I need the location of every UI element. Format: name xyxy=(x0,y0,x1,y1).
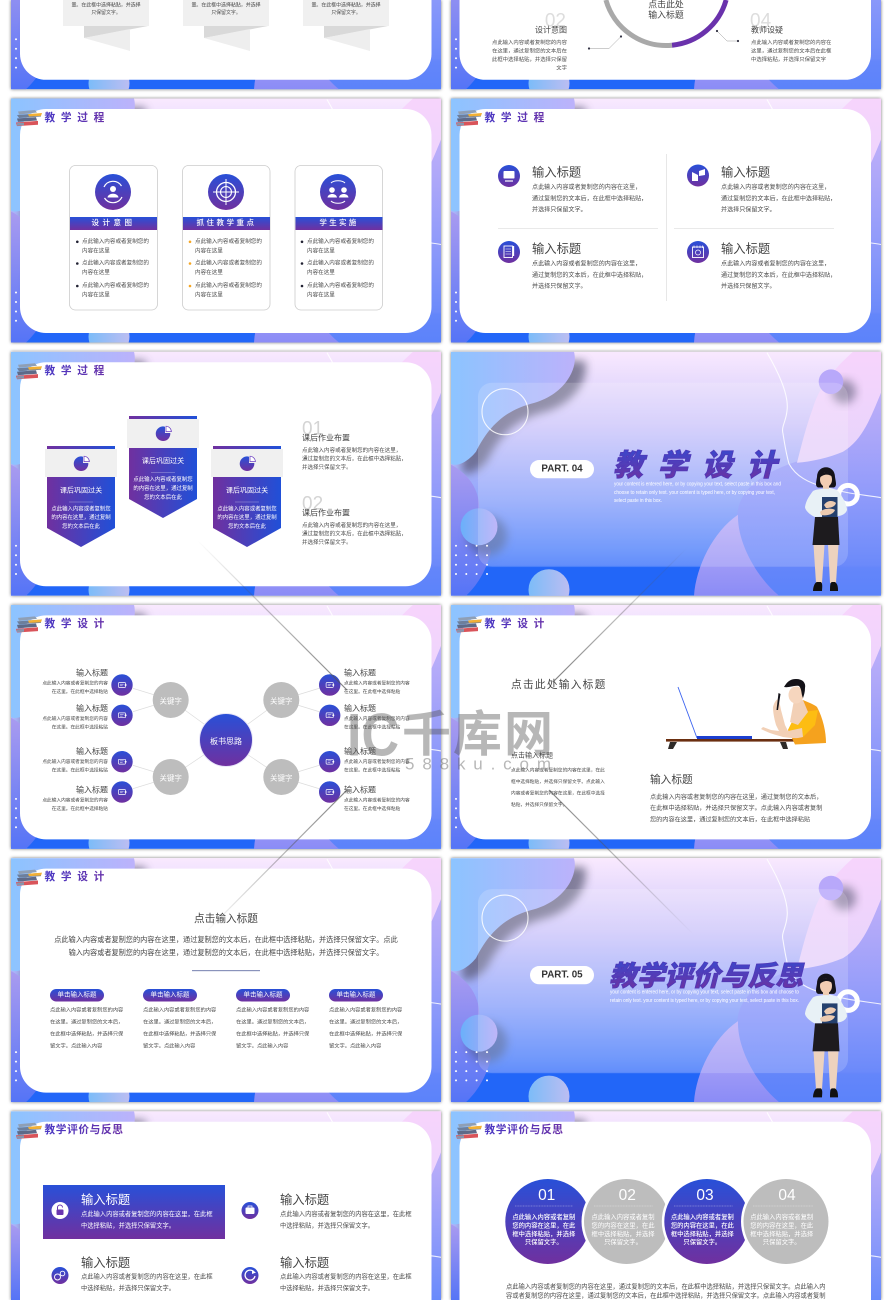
ribbon card 1: 量。在此框中选择粘贴，并选择 xyxy=(71,2,141,8)
ribbon 3: 点此输入内容或者复制您 xyxy=(217,504,277,512)
right labels: 输入标题 xyxy=(344,746,376,756)
section text: choose to retain only text. your content is typed here, or by copying your text, xyxy=(614,490,775,496)
heading: 教学设计 xyxy=(484,617,550,630)
homework 01: 01 xyxy=(302,418,323,440)
item 4: 并选择只保留文字。 xyxy=(721,282,776,290)
circle 04: 框中选择粘贴，并选择 xyxy=(750,1229,814,1238)
homework 02: 通过复制您的文本后，在此框中选择粘贴， xyxy=(302,530,407,538)
icon: person cycle xyxy=(95,174,131,210)
header icon: books xyxy=(16,110,42,126)
section title: 教学设计 xyxy=(613,450,791,482)
left text block xyxy=(511,750,605,808)
centered paragraph xyxy=(54,935,398,957)
item 02: 02 xyxy=(545,10,566,32)
column 1: 单击输入标题 xyxy=(58,990,97,998)
watermark: 588ku.com xyxy=(405,754,551,774)
circle 03: 只保留文字。 xyxy=(683,1237,721,1246)
card 1: 点此输入内容或者复制您的 xyxy=(82,258,149,266)
header icon: books xyxy=(16,870,42,886)
item 04: 04 xyxy=(750,10,772,32)
ribbon 3: 的内容在这里，通过复制 xyxy=(217,513,277,521)
column 4: 在此框中选择粘贴，并选择只保 xyxy=(329,1029,403,1037)
left text block: 内容或者复制您的内容在这里，在此框中选择 xyxy=(511,790,605,796)
item bottom right: 点此输入内容或者复制您的内容在这里，在此框 xyxy=(280,1272,412,1280)
heading: 教学设计 xyxy=(44,617,110,630)
circle 01 xyxy=(505,1179,590,1264)
column 2: 单击输入标题 xyxy=(150,990,190,998)
pill: PART 05: PART. 05 xyxy=(541,970,583,980)
homework 02: 课后作业布置 xyxy=(302,508,350,518)
bottom paragraph: 容或者复制您的内容在这里，通过复制您的文本后，在此框中选择粘贴，并选择只保留文字。点此输入内容或者复制 xyxy=(506,1290,826,1300)
card 3: 内容在这里 xyxy=(307,246,335,254)
card 2: 点此输入内容或者复制您的 xyxy=(195,258,262,266)
ribbon 3: 课后巩固过关 xyxy=(226,486,268,494)
section text xyxy=(610,990,799,1004)
slide: section PART 05 xyxy=(451,858,881,1117)
right text block: 在此框中选择粘贴，并选择只保留文字。点此输入内容或者复制 xyxy=(650,804,822,812)
left labels: 点此输入内容或者复制您的内容 xyxy=(42,796,108,804)
keyword nodes xyxy=(153,682,299,795)
homework 02: 02 xyxy=(302,494,323,514)
card 3: 点此输入内容或者复制您的 xyxy=(307,237,374,245)
ribbon 1: 点此输入内容或者复制您 xyxy=(51,504,111,512)
heading: 教学评价与反思 xyxy=(44,1123,124,1136)
slide: evaluation list xyxy=(11,1111,441,1300)
left title: 点击此处输入标题 xyxy=(511,678,607,691)
right labels: 点此输入内容或者复制您的内容 xyxy=(344,715,410,722)
left labels: 在这里。在此框中选择粘贴 xyxy=(52,724,108,730)
ring chart xyxy=(606,0,726,45)
column 2: 点此输入内容或者复制您的内容 xyxy=(143,1006,217,1014)
circle 03: 03 xyxy=(696,1187,714,1204)
item 02 xyxy=(492,10,568,71)
homework 01: 通过复制您的文本后，在此框中选择粘贴， xyxy=(302,455,407,463)
keyword labels: 关键字 xyxy=(159,772,182,782)
ribbon card 3: 量。在此框中选择粘贴，并选择 xyxy=(311,2,381,8)
right labels: 点此输入内容或者复制您的内容 xyxy=(344,758,410,765)
card 1: 点此输入内容或者复制您的 xyxy=(82,237,149,245)
card 2: 点此输入内容或者复制您的 xyxy=(195,281,262,289)
highlighted item: 点此输入内容或者复制您的内容在这里，在此框 xyxy=(81,1209,213,1218)
item 2: 输入标题 xyxy=(721,164,770,180)
item 4 xyxy=(687,241,836,290)
keyword labels: 关键字 xyxy=(270,772,293,782)
item 3: 输入标题 xyxy=(532,241,581,256)
ring label: 输入标题 xyxy=(648,9,684,20)
column 3: 单击输入标题 xyxy=(244,990,283,998)
item bottom right: 输入标题 xyxy=(280,1255,329,1270)
column 2: 在此框中选择粘贴，并选择只保 xyxy=(143,1029,217,1037)
node icons xyxy=(118,683,334,794)
left text block: 点此输入内容或者复制您的内容在这里，在此 xyxy=(511,766,605,774)
centered paragraph: 输入内容或者复制您的内容在这里，通过复制您的文本后，在此框中选择粘贴，并选择只保留文字。 xyxy=(69,948,383,957)
highlighted item: 中选择粘贴，并选择只保留文字。 xyxy=(81,1220,175,1230)
dividers xyxy=(498,154,834,301)
section text: retain only text. your content is typed here, or by copying your text, select paste in this box. xyxy=(610,998,799,1004)
slide: four pills xyxy=(11,858,441,1117)
card 2: 内容在这里 xyxy=(195,268,223,276)
ribbon card 2 xyxy=(183,0,269,51)
section text: your content is entered here, or by copying your text, select paste in this box and choose to xyxy=(610,990,799,996)
column 2: 在这里。通过复制您的文本后， xyxy=(143,1018,216,1026)
connector lines xyxy=(122,685,330,792)
ribbon 2 xyxy=(127,416,199,518)
ribbon 2: 课后巩固过关 xyxy=(142,456,184,465)
left text block: 粘贴，并选择只保留文字。 xyxy=(511,801,567,808)
ribbon card 2: 量。在此框中选择粘贴，并选择 xyxy=(191,2,261,8)
card 3: 点此输入内容或者复制您的 xyxy=(307,281,374,289)
homework 02: 并选择只保留文字。 xyxy=(302,538,352,546)
homework 01: 点此输入内容或者复制您的内容在这里， xyxy=(302,446,401,454)
keyword labels xyxy=(159,696,293,782)
item 2: 并选择只保留文字。 xyxy=(721,206,776,214)
illustration: man with laptop xyxy=(666,679,826,749)
left labels: 点此输入内容或者复制您的内容 xyxy=(42,715,108,722)
watermark: IC xyxy=(347,702,399,768)
right text block: 点此输入内容或者复制您的内容在这里，通过复制您的文本后， xyxy=(650,793,822,801)
circle 03: 点此输入内容或者复制 xyxy=(671,1212,734,1221)
item 02: 点此输入内容或者复制您的内容 xyxy=(492,38,568,46)
right labels: 在这里。在此框中选择粘贴 xyxy=(344,805,401,812)
item 2: 点此输入内容或者复制您的内容在这里， xyxy=(721,183,830,191)
item 1: 通过复制您的文本后，在此框中选择粘贴， xyxy=(532,194,647,202)
column 2: 留文字。点此输入内容 xyxy=(143,1041,196,1049)
circle 01: 框中选择粘贴，并选择 xyxy=(512,1229,576,1238)
slide: four circles xyxy=(451,1111,881,1300)
homework 02: 点此输入内容或者复制您的内容在这里， xyxy=(302,521,401,529)
header icon: books xyxy=(456,110,482,126)
card 1: 点此输入内容或者复制您的 xyxy=(82,281,149,289)
card 1 xyxy=(70,166,158,310)
card 2: 内容在这里 xyxy=(195,246,223,254)
watermark: 千库网 xyxy=(402,708,555,762)
highlighted item xyxy=(43,1185,225,1239)
ribbon 2: 点此输入内容或者复制您 xyxy=(133,475,193,483)
keyword labels: 关键字 xyxy=(270,696,293,706)
item 3: 通过复制您的文本后，在此框中选择粘贴， xyxy=(532,271,647,279)
item 04: 这里，通过复制您的文本后在此框 xyxy=(751,46,832,54)
left labels: 点此输入内容或者复制您的内容 xyxy=(42,758,108,765)
ribbon card 3: 只保留文字。 xyxy=(331,9,361,16)
card 2 xyxy=(182,166,270,310)
circle 04 xyxy=(741,1176,831,1266)
card 3: 内容在这里 xyxy=(307,290,335,298)
slide: mind map xyxy=(11,605,441,863)
item bottom left: 中选择粘贴，并选择只保留文字。 xyxy=(81,1283,175,1292)
item bottom right xyxy=(242,1255,412,1292)
card 2: 抓住教学重点 xyxy=(196,217,256,227)
item 2: 通过复制您的文本后，在此框中选择粘贴， xyxy=(721,194,836,202)
header icon: books xyxy=(16,616,42,632)
left labels: 输入标题 xyxy=(76,784,108,794)
circle 01: 只保留文字。 xyxy=(525,1237,563,1246)
card 1: 内容在这里 xyxy=(82,290,110,298)
right labels: 输入标题 xyxy=(344,703,376,713)
card 2: 内容在这里 xyxy=(195,290,223,298)
item bottom left xyxy=(52,1255,213,1292)
left labels xyxy=(42,668,108,812)
column 1: 点此输入内容或者复制您的内容 xyxy=(50,1006,124,1014)
left labels: 在这里。在此框中选择粘贴 xyxy=(52,766,108,774)
ribbon 1: 的内容在这里，通过复制 xyxy=(51,513,111,521)
item 04: 中选择粘贴，并选择只保留文字 xyxy=(751,55,826,63)
circle 03: 您的内容在这里，在此 xyxy=(671,1220,734,1230)
column 1: 在这里。通过复制您的文本后， xyxy=(50,1018,123,1026)
item 4: 点此输入内容或者复制您的内容在这里， xyxy=(721,260,830,268)
item 1 xyxy=(498,164,647,214)
homework 02 xyxy=(302,494,407,546)
left labels: 在这里。在此框中选择粘贴 xyxy=(52,688,108,695)
pill: PART 04: PART. 04 xyxy=(541,464,583,474)
column 2 xyxy=(143,989,217,1049)
card 2: 点此输入内容或者复制您的 xyxy=(195,237,262,245)
card 3: 学生实施 xyxy=(319,217,359,227)
right text block xyxy=(650,773,822,824)
item 4: 输入标题 xyxy=(721,241,770,256)
item 1: 点此输入内容或者复制您的内容在这里， xyxy=(532,183,641,191)
card 1: 内容在这里 xyxy=(82,246,110,254)
item 3: 点此输入内容或者复制您的内容在这里， xyxy=(532,260,641,268)
right labels: 点此输入内容或者复制您的内容 xyxy=(344,680,410,686)
item 1: 并选择只保留文字。 xyxy=(532,206,587,214)
item 4: 通过复制您的文本后，在此框中选择粘贴， xyxy=(721,271,836,279)
circle 01: 您的内容在这里，在此 xyxy=(512,1220,576,1230)
circle 02: 点此输入内容或者复制 xyxy=(592,1212,654,1221)
heading: 教学过程 xyxy=(44,364,110,377)
slide: ribbon cards (top left) xyxy=(11,0,441,104)
heading: 教学过程 xyxy=(484,111,550,124)
keyword labels: 关键字 xyxy=(159,696,182,706)
header icon: books xyxy=(16,1123,42,1139)
ribbon 2: 的内容在这里，通过复制 xyxy=(133,484,193,492)
right labels: 点此输入内容或者复制您的内容 xyxy=(344,796,410,804)
circle 02: 02 xyxy=(619,1187,636,1204)
column 3: 在此框中选择粘贴，并选择只保 xyxy=(236,1029,310,1037)
header icon: books xyxy=(16,363,42,379)
homework 01: 并选择只保留文字。 xyxy=(302,463,352,471)
left text block: 点击输入标题 xyxy=(511,750,553,760)
connector 02 xyxy=(588,35,622,50)
card 3 xyxy=(295,166,382,310)
card 3: 内容在这里 xyxy=(307,268,335,276)
circle 04: 点此输入内容或者复制 xyxy=(750,1212,813,1221)
section text: select paste in this box. xyxy=(614,498,662,504)
card 3: 点此输入内容或者复制您的 xyxy=(307,258,374,266)
item top right: 输入标题 xyxy=(280,1192,329,1207)
item top right xyxy=(242,1192,412,1230)
ribbon 3: 您的文本后在此 xyxy=(228,522,266,530)
ring label xyxy=(648,0,684,20)
left labels: 输入标题 xyxy=(76,746,108,756)
item top right: 中选择粘贴，并选择只保留文字。 xyxy=(280,1220,374,1230)
heading: 教学评价与反思 xyxy=(484,1123,564,1136)
circle 01: 01 xyxy=(538,1187,555,1204)
item 3: 并选择只保留文字。 xyxy=(532,282,587,290)
column 3: 留文字。点此输入内容 xyxy=(236,1041,289,1049)
column 1: 在此框中选择粘贴，并选择只保 xyxy=(50,1029,124,1037)
ribbon 1: 您的文本后在此 xyxy=(62,522,100,530)
heading: 教学设计 xyxy=(44,870,110,883)
left labels: 输入标题 xyxy=(76,703,108,713)
bottom paragraph: 点此输入内容或者复制您的内容在这里，通过复制您的文本后，在此框中选择粘贴，并选择只保留文字。点此输入内 xyxy=(506,1282,826,1290)
ribbon 2: 您的文本后在此 xyxy=(144,493,182,501)
card 1: 内容在这里 xyxy=(82,268,110,276)
item bottom right: 中选择粘贴，并选择只保留文字。 xyxy=(280,1283,374,1292)
circle 04: 只保留文字。 xyxy=(763,1237,801,1246)
right labels: 在这里。在此框中选择粘贴 xyxy=(344,724,401,730)
right labels: 输入标题 xyxy=(344,668,376,678)
bottom paragraph xyxy=(506,1282,826,1300)
item 04 xyxy=(750,10,832,63)
item bottom left: 点此输入内容或者复制您的内容在这里，在此框 xyxy=(81,1272,213,1280)
item 04: 教师设疑 xyxy=(751,24,783,34)
right labels xyxy=(344,668,410,812)
item bottom left: 输入标题 xyxy=(81,1255,130,1270)
right labels: 在这里。在此框中选择粘贴 xyxy=(344,688,401,695)
circle 02 xyxy=(582,1176,672,1266)
column 4 xyxy=(329,989,403,1049)
column 4: 单击输入标题 xyxy=(336,990,376,998)
circle 02: 只保留文字。 xyxy=(604,1237,642,1246)
circle 02: 框中选择粘贴，并选择 xyxy=(592,1229,655,1238)
item 02: 此框中选择粘贴，并选择只保留 xyxy=(492,55,567,63)
slide: ring diagram (top right) xyxy=(451,0,881,104)
item 02: 在这里，通过复制您的文本后在 xyxy=(492,46,568,54)
left labels: 在这里。在此框中选择粘贴 xyxy=(52,805,108,812)
slide: teaching process three cards xyxy=(11,98,441,357)
center node: 板书思路 xyxy=(210,736,242,746)
column 1: 留文字。点此输入内容 xyxy=(50,1041,103,1049)
ribbon card 2: 只保留文字。 xyxy=(211,9,241,16)
column 3: 点此输入内容或者复制您的内容 xyxy=(236,1006,310,1014)
column 4: 点此输入内容或者复制您的内容 xyxy=(329,1006,403,1014)
pill: PART 05 xyxy=(530,966,594,984)
pill: PART 04 xyxy=(530,460,594,478)
centered paragraph: 点此输入内容或者复制您的内容在这里，通过复制您的文本后，在此框中选择粘贴，并选择只保留文字。点此 xyxy=(54,935,398,944)
left text block: 框中选择粘贴，并选择只保留文字。点此输入 xyxy=(511,778,605,785)
item top right: 点此输入内容或者复制您的内容在这里，在此框 xyxy=(280,1209,412,1218)
left labels: 点此输入内容或者复制您的内容 xyxy=(42,680,108,686)
ribbon card 3 xyxy=(303,0,389,51)
figure: woman with book xyxy=(805,974,847,1097)
ribbon card 1: 只保留文字。 xyxy=(91,9,121,16)
card 1: 设计意图 xyxy=(92,217,136,227)
header icon: books xyxy=(456,616,482,632)
right text block: 您的内容在这里，通过复制您的文本后，在此框中选择粘贴 xyxy=(650,816,810,824)
circle 03: 框中选择粘贴，并选择 xyxy=(671,1229,734,1238)
highlighted item: 输入标题 xyxy=(81,1192,130,1207)
circle 02: 您的内容在这里，在此 xyxy=(592,1220,655,1230)
ribbon 1 xyxy=(45,446,117,547)
item 04: 点此输入内容或者复制您的内容在 xyxy=(751,38,832,46)
ribbon card 1 xyxy=(63,0,149,51)
item 02: 文字 xyxy=(556,63,567,71)
icon: two students xyxy=(320,174,356,210)
homework 01 xyxy=(302,418,407,471)
watermark xyxy=(197,540,694,935)
icon: target xyxy=(208,174,244,210)
section text xyxy=(614,482,781,504)
header icon: books xyxy=(456,1123,482,1139)
column 3 xyxy=(236,989,310,1049)
column 1 xyxy=(50,989,124,1049)
figure: woman with book xyxy=(805,467,847,591)
column 4: 留文字。点此输入内容 xyxy=(329,1041,382,1049)
center node xyxy=(200,714,252,766)
heading: 教学过程 xyxy=(44,111,110,124)
item 2 xyxy=(687,164,836,214)
slide: homework ribbons xyxy=(11,352,441,610)
circle 04: 您的内容在这里，在此 xyxy=(750,1220,814,1230)
item 02: 设计意图 xyxy=(535,24,567,34)
column 4: 在这里。通过复制您的文本后， xyxy=(329,1018,402,1026)
small nodes xyxy=(111,674,341,803)
slide: laptop illustration xyxy=(451,605,881,863)
section title: 教学评价与反思 xyxy=(609,960,805,992)
slide: section PART 04 xyxy=(451,352,881,610)
left labels: 输入标题 xyxy=(76,668,108,678)
circle 03 xyxy=(662,1176,752,1266)
right labels: 在这里。在此框中选择粘贴 xyxy=(344,766,401,774)
column 3: 在这里。通过复制您的文本后， xyxy=(236,1018,309,1026)
centered title: 点击输入标题 xyxy=(194,912,258,925)
ribbon 1: 课后巩固过关 xyxy=(60,486,102,494)
slide: teaching process four items xyxy=(451,98,881,357)
ribbon 3 xyxy=(211,446,283,547)
section text: your content is entered here, or by copying your text, select paste in this box and xyxy=(614,482,781,488)
circle 01: 点此输入内容或者复制 xyxy=(512,1212,575,1221)
circle 04: 04 xyxy=(778,1187,796,1204)
item 3 xyxy=(498,241,647,290)
right text block: 输入标题 xyxy=(650,773,693,786)
right labels: 输入标题 xyxy=(344,784,376,794)
item 1: 输入标题 xyxy=(532,164,581,180)
connector 04 xyxy=(716,30,739,42)
homework 01: 课后作业布置 xyxy=(302,432,350,442)
